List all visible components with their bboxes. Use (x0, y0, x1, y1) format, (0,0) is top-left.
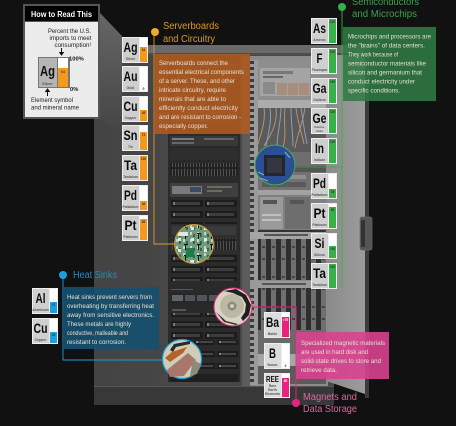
server cabinet (94, 45, 372, 405)
tile: silver (122, 37, 148, 63)
tile: palladium: Pd (313, 175, 326, 191)
panel: serverboards text (154, 54, 250, 134)
tile: indium: 100 (330, 140, 335, 144)
legend caption: percent imported: consumption¹ (54, 43, 92, 49)
marker dot: serverboards (151, 28, 159, 36)
connector line: magnets (251, 307, 296, 403)
panel: semiconductors text: specific conditions. (348, 87, 400, 94)
cabinet plinth (94, 386, 334, 405)
tile: boron: 0 (285, 364, 287, 368)
tile: tin (122, 125, 148, 151)
tile: palladium (122, 185, 148, 211)
circle: circuit board (174, 224, 214, 264)
tile: gold: Gold (127, 86, 134, 90)
panel: semiconductors text (343, 27, 436, 101)
panel: serverboards text: especially copper. (159, 123, 208, 130)
arrow: down (59, 48, 64, 55)
connector line: semiconductors branch (295, 166, 342, 168)
panel: heat sinks text (63, 287, 159, 349)
connector line: semiconductors (341, 7, 343, 287)
panel: magnets text (296, 332, 389, 379)
tile: palladium (311, 173, 337, 199)
tile: platinum: Platinum (123, 235, 138, 239)
tile: indium: Indium (314, 158, 325, 162)
legend caption: element name: Element symbol (31, 98, 73, 104)
tile: silver: 64 (142, 48, 145, 52)
rack server pair (258, 195, 326, 230)
panel: magnets text: retrieve data. (301, 367, 337, 374)
tile: rare earth elements: REE (266, 375, 280, 384)
tile: platinum: 85 (331, 208, 334, 212)
panel: serverboards text: Serverboards connect the (159, 60, 228, 67)
tile: rare earth elements (264, 373, 290, 398)
connector line: heat sinks (63, 275, 162, 360)
tile: tantalum: Tantalum (123, 175, 138, 179)
panel: heat sinks text: conductive, malleable and (67, 330, 128, 337)
legend caption: percent imported: Percent the U.S. (48, 29, 91, 35)
tile: arsenic: Arsenic (313, 38, 326, 42)
tile: arsenic (311, 18, 337, 44)
panel: magnets text: Specialized magnetic materials (301, 340, 386, 347)
tile: barite: >75 (283, 318, 288, 322)
door handle (360, 217, 372, 250)
right door (326, 55, 365, 394)
heading: heat sinks: Heat Sinks (73, 270, 117, 281)
tile: silicon (311, 233, 337, 259)
tile: platinum: Pt (314, 205, 326, 221)
tile: silver: Ag (124, 39, 138, 55)
heading: serverboards (163, 21, 219, 45)
legend caption: element name (31, 98, 80, 112)
arrow: up (45, 89, 50, 96)
legend caption: element name: and mineral name (31, 106, 80, 112)
tile: fluorspar: Fluorspar (312, 68, 328, 72)
tile: germanium: 100 (330, 110, 335, 114)
panel: semiconductors text: semiconductor materials like (348, 60, 426, 67)
tile: indium (311, 138, 337, 164)
tile: boron: Boron (268, 363, 277, 367)
connector line: serverboards (154, 32, 174, 244)
tile: copper (32, 318, 58, 344)
panel title: How to Read This (31, 10, 92, 19)
scale label: 100%: 100% (69, 56, 84, 62)
tile: platinum: Pt (124, 217, 137, 233)
tile: tin: Tin (128, 145, 133, 149)
panel: how to read this (23, 4, 100, 119)
tile: palladium: 36 (331, 190, 334, 194)
tile: tantalum (122, 155, 148, 181)
tile: rare earth elements: Elements (265, 392, 280, 396)
panel: semiconductors text: the "brains" of data centers. (348, 42, 425, 49)
tile: aluminum: 47 (52, 303, 55, 307)
tile: tantalum: Ta (313, 265, 326, 281)
tile: germanium (311, 108, 337, 134)
tile: tantalum: 100 (330, 265, 335, 269)
tile: aluminum: Aluminum (32, 308, 49, 312)
rack device panel (258, 61, 326, 101)
heading: semiconductors: and Microchips (352, 9, 417, 20)
tile: germanium: Germa- (314, 125, 325, 129)
tile: barite: Barite (268, 332, 277, 336)
tile: germanium: nium (316, 129, 323, 133)
heading: serverboards: and Circuitry (163, 34, 215, 45)
panel: semiconductors text: Microchips and processors are (348, 33, 431, 40)
tile: palladium: Pd (124, 187, 137, 203)
panel: magnets text: solid-state drives to store and (301, 358, 381, 365)
legend sample tile: Ag (40, 63, 55, 80)
tile: gallium: Gallium (313, 98, 326, 102)
tile: gold: Au (124, 68, 138, 84)
tile: barite: Ba (266, 314, 279, 330)
panel: serverboards text: of a server. These, and other (159, 78, 236, 85)
tile: gold: 0 (143, 87, 145, 91)
tile: fluorspar (311, 48, 337, 74)
tile: tin: 73 (142, 133, 145, 137)
scale label: 0%: 0% (70, 87, 78, 93)
panel: heat sinks text: overheating by transferring heat (67, 303, 154, 310)
tile: gallium (311, 78, 337, 104)
tile: copper: Cu (124, 98, 138, 114)
tile: silicon: Si (314, 235, 324, 251)
tile: copper (122, 96, 148, 122)
tile: silicon: Silicon (314, 253, 325, 257)
circle: hard disk (214, 288, 252, 326)
panel: magnets text: are used in hard disk and (301, 349, 368, 356)
tile: rare earth elements: 80 (284, 379, 287, 383)
tile: fluorspar: 100 (330, 50, 335, 54)
tile: tantalum: 100 (141, 157, 146, 161)
panel: serverboards text: minerals that are able to (159, 96, 226, 103)
tile: palladium: 36 (142, 202, 145, 206)
legend sample tile: Silver (42, 81, 53, 86)
circle: heat sink (162, 340, 202, 378)
panel: semiconductors text: silicon and germanium that (348, 69, 422, 76)
tile: platinum: 85 (142, 220, 145, 224)
right rack (242, 56, 328, 386)
tile: copper: Cu (34, 320, 48, 336)
legend caption: percent imported: imports to meet (50, 36, 92, 42)
panel: serverboards text: and are resistant to corrosion - (159, 114, 241, 121)
tile: aluminum: Al (36, 290, 46, 306)
panel: heat sinks text: Heat sinks prevent servers from (67, 294, 152, 301)
tile: rare earth elements: Rare (269, 384, 276, 388)
tile: palladium: Palladium (122, 205, 139, 209)
tile: copper: 45 (142, 111, 145, 115)
tile: copper: 45 (52, 333, 55, 337)
marker dot: magnets (292, 399, 300, 407)
tile: barite (264, 312, 290, 338)
tile: gallium: 100 (330, 80, 335, 84)
tile: platinum: Platinum (312, 223, 327, 227)
tile: tantalum (311, 263, 337, 289)
how to read panel connector (100, 13, 122, 135)
tile: platinum (122, 215, 148, 241)
cabinet body and left door (94, 45, 334, 405)
tile: tantalum: Tantalum (312, 283, 327, 287)
tile: indium: In (315, 140, 324, 156)
panel: serverboards text: essential electrical components (159, 69, 245, 76)
heading: magnets: Magnets and (303, 392, 357, 403)
tile: palladium: Palladium (311, 193, 328, 197)
tile: boron (264, 343, 290, 369)
panel: semiconductors text: They work because of (348, 51, 398, 58)
circle: microchip (255, 145, 295, 185)
tile: tin: Sn (124, 127, 138, 143)
tile: rare earth elements: Earth (268, 388, 277, 392)
panel: heat sinks text: resistant to corrosion. (67, 339, 126, 346)
left rack (168, 56, 240, 382)
tile: arsenic: As (313, 20, 326, 36)
heading: magnets: Data Storage (303, 404, 357, 415)
tile: boron: B (269, 345, 276, 361)
tile: aluminum (32, 288, 58, 314)
tile: silicon: <50 (330, 247, 335, 251)
panel: semiconductors text: conduct electricity under (348, 78, 416, 85)
panel: heat sinks text: These metals are highly (67, 321, 132, 328)
cable bay (258, 108, 326, 152)
heading: semiconductors (352, 0, 419, 20)
panel: serverboards text: intricate circuitry, require (159, 87, 226, 94)
marker dot: heat sinks (59, 271, 67, 279)
tile: copper: Copper (125, 116, 137, 120)
tile: germanium: Ge (312, 110, 327, 126)
tile: tantalum: Ta (124, 157, 137, 173)
heading: magnets (303, 392, 357, 415)
tile: platinum (311, 203, 337, 229)
heading: serverboards: Serverboards (163, 21, 219, 32)
tile: arsenic: 100 (330, 20, 335, 24)
marker dot: semiconductors (338, 3, 346, 11)
tile: gallium: Ga (312, 80, 327, 96)
panel: serverboards text: efficiently conduct electricity (159, 105, 239, 112)
tile: gold (122, 66, 148, 92)
panel: heat sinks text: away from sensitive electronics. (67, 312, 154, 319)
tile: copper: Copper (35, 338, 47, 342)
legend caption: percent imported (48, 29, 92, 49)
tile: fluorspar: F (316, 50, 323, 66)
tile: silver: Silver (126, 57, 136, 61)
legend sample tile: 64 (61, 70, 65, 74)
legend sample tile (38, 57, 70, 88)
